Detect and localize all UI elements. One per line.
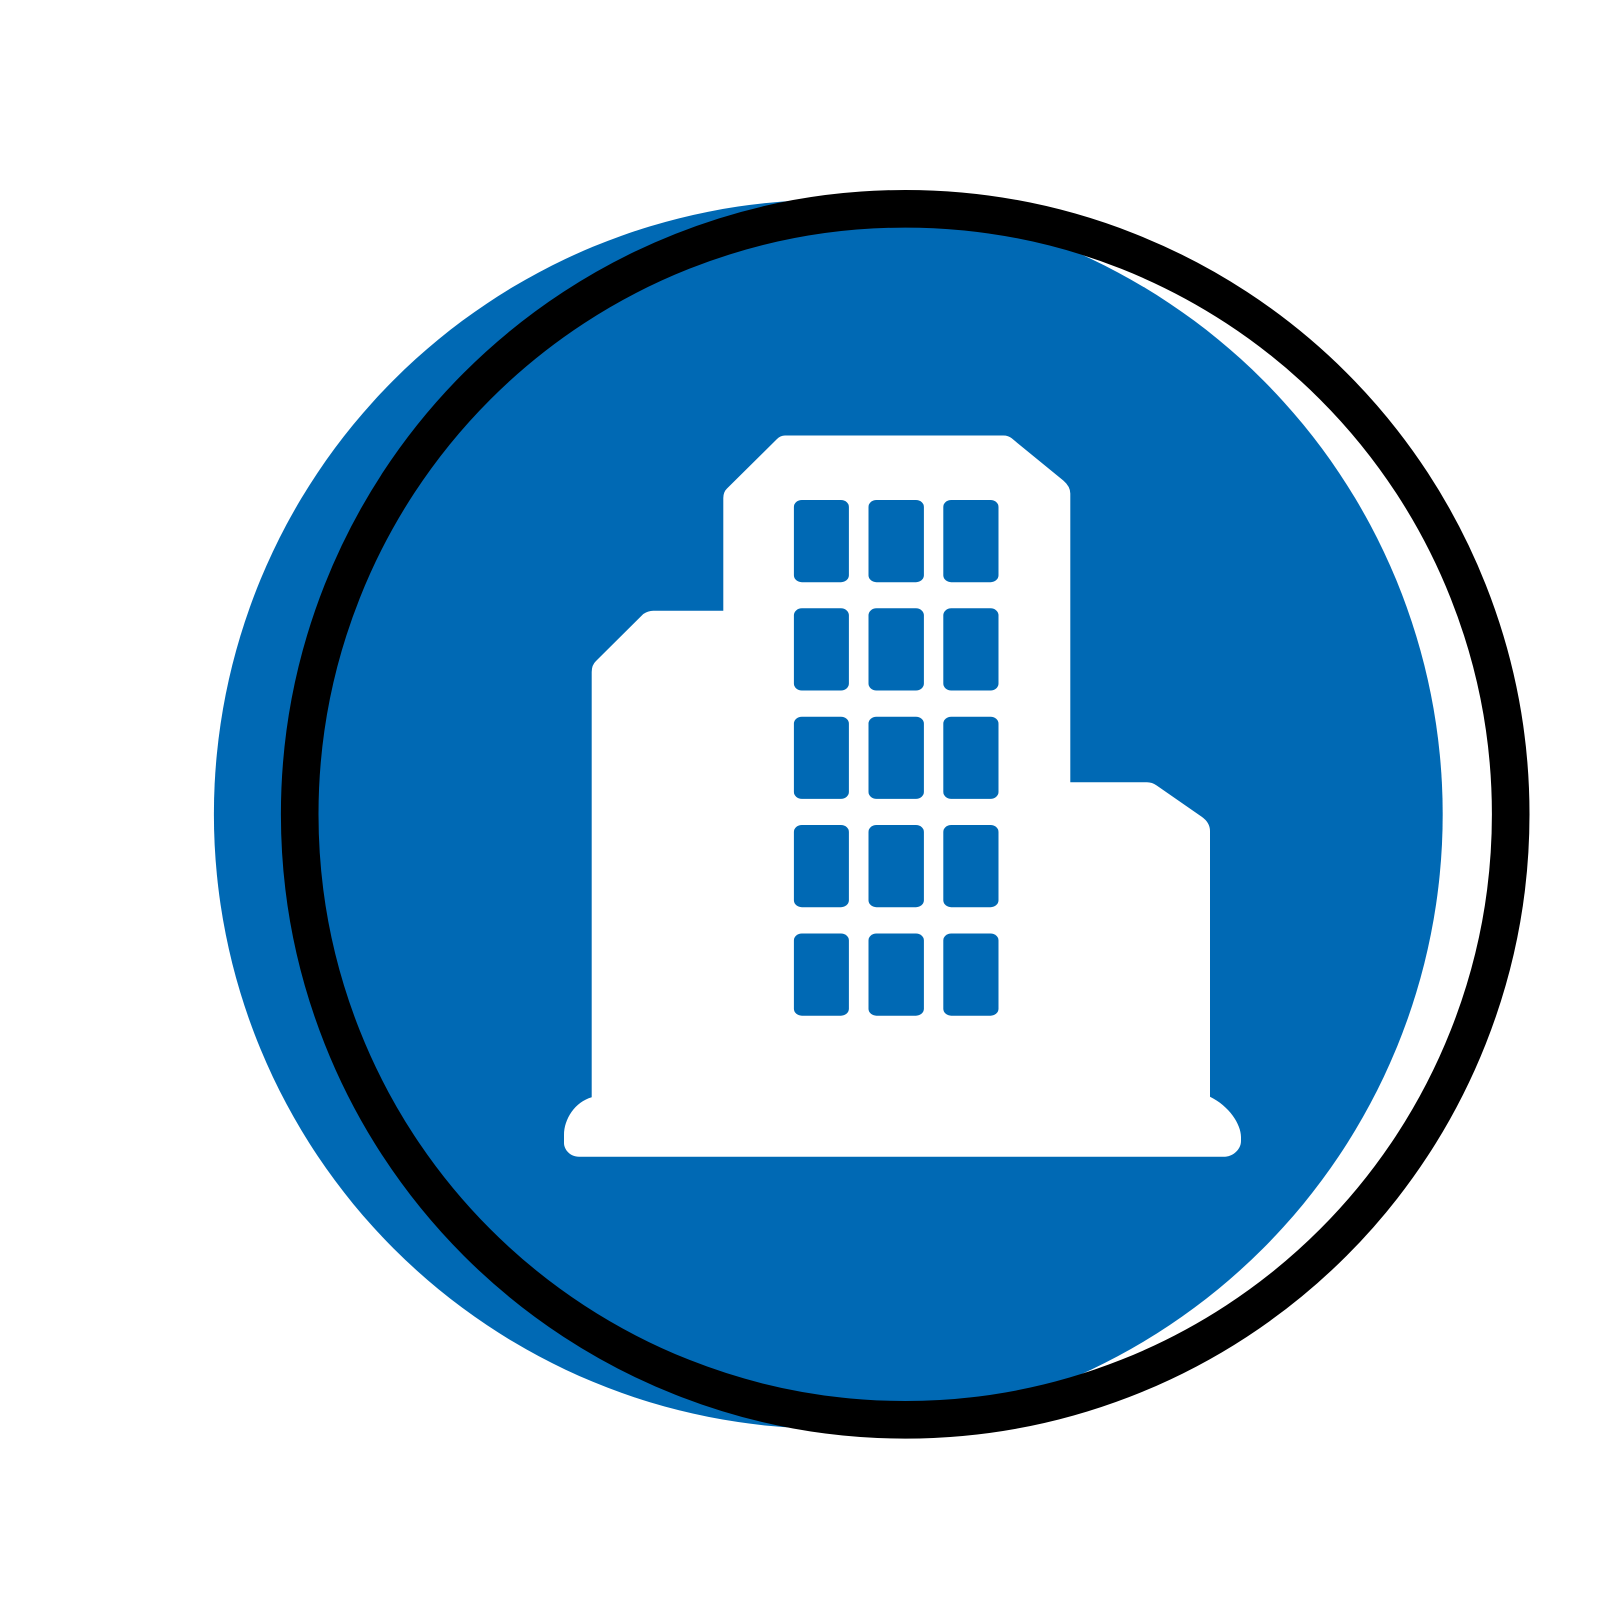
black ring outline [300, 209, 1511, 1420]
icon: office building [564, 436, 1241, 1157]
windows grid [794, 500, 998, 1016]
building silhouette [564, 436, 1241, 1157]
blue offset disc [214, 200, 1443, 1429]
